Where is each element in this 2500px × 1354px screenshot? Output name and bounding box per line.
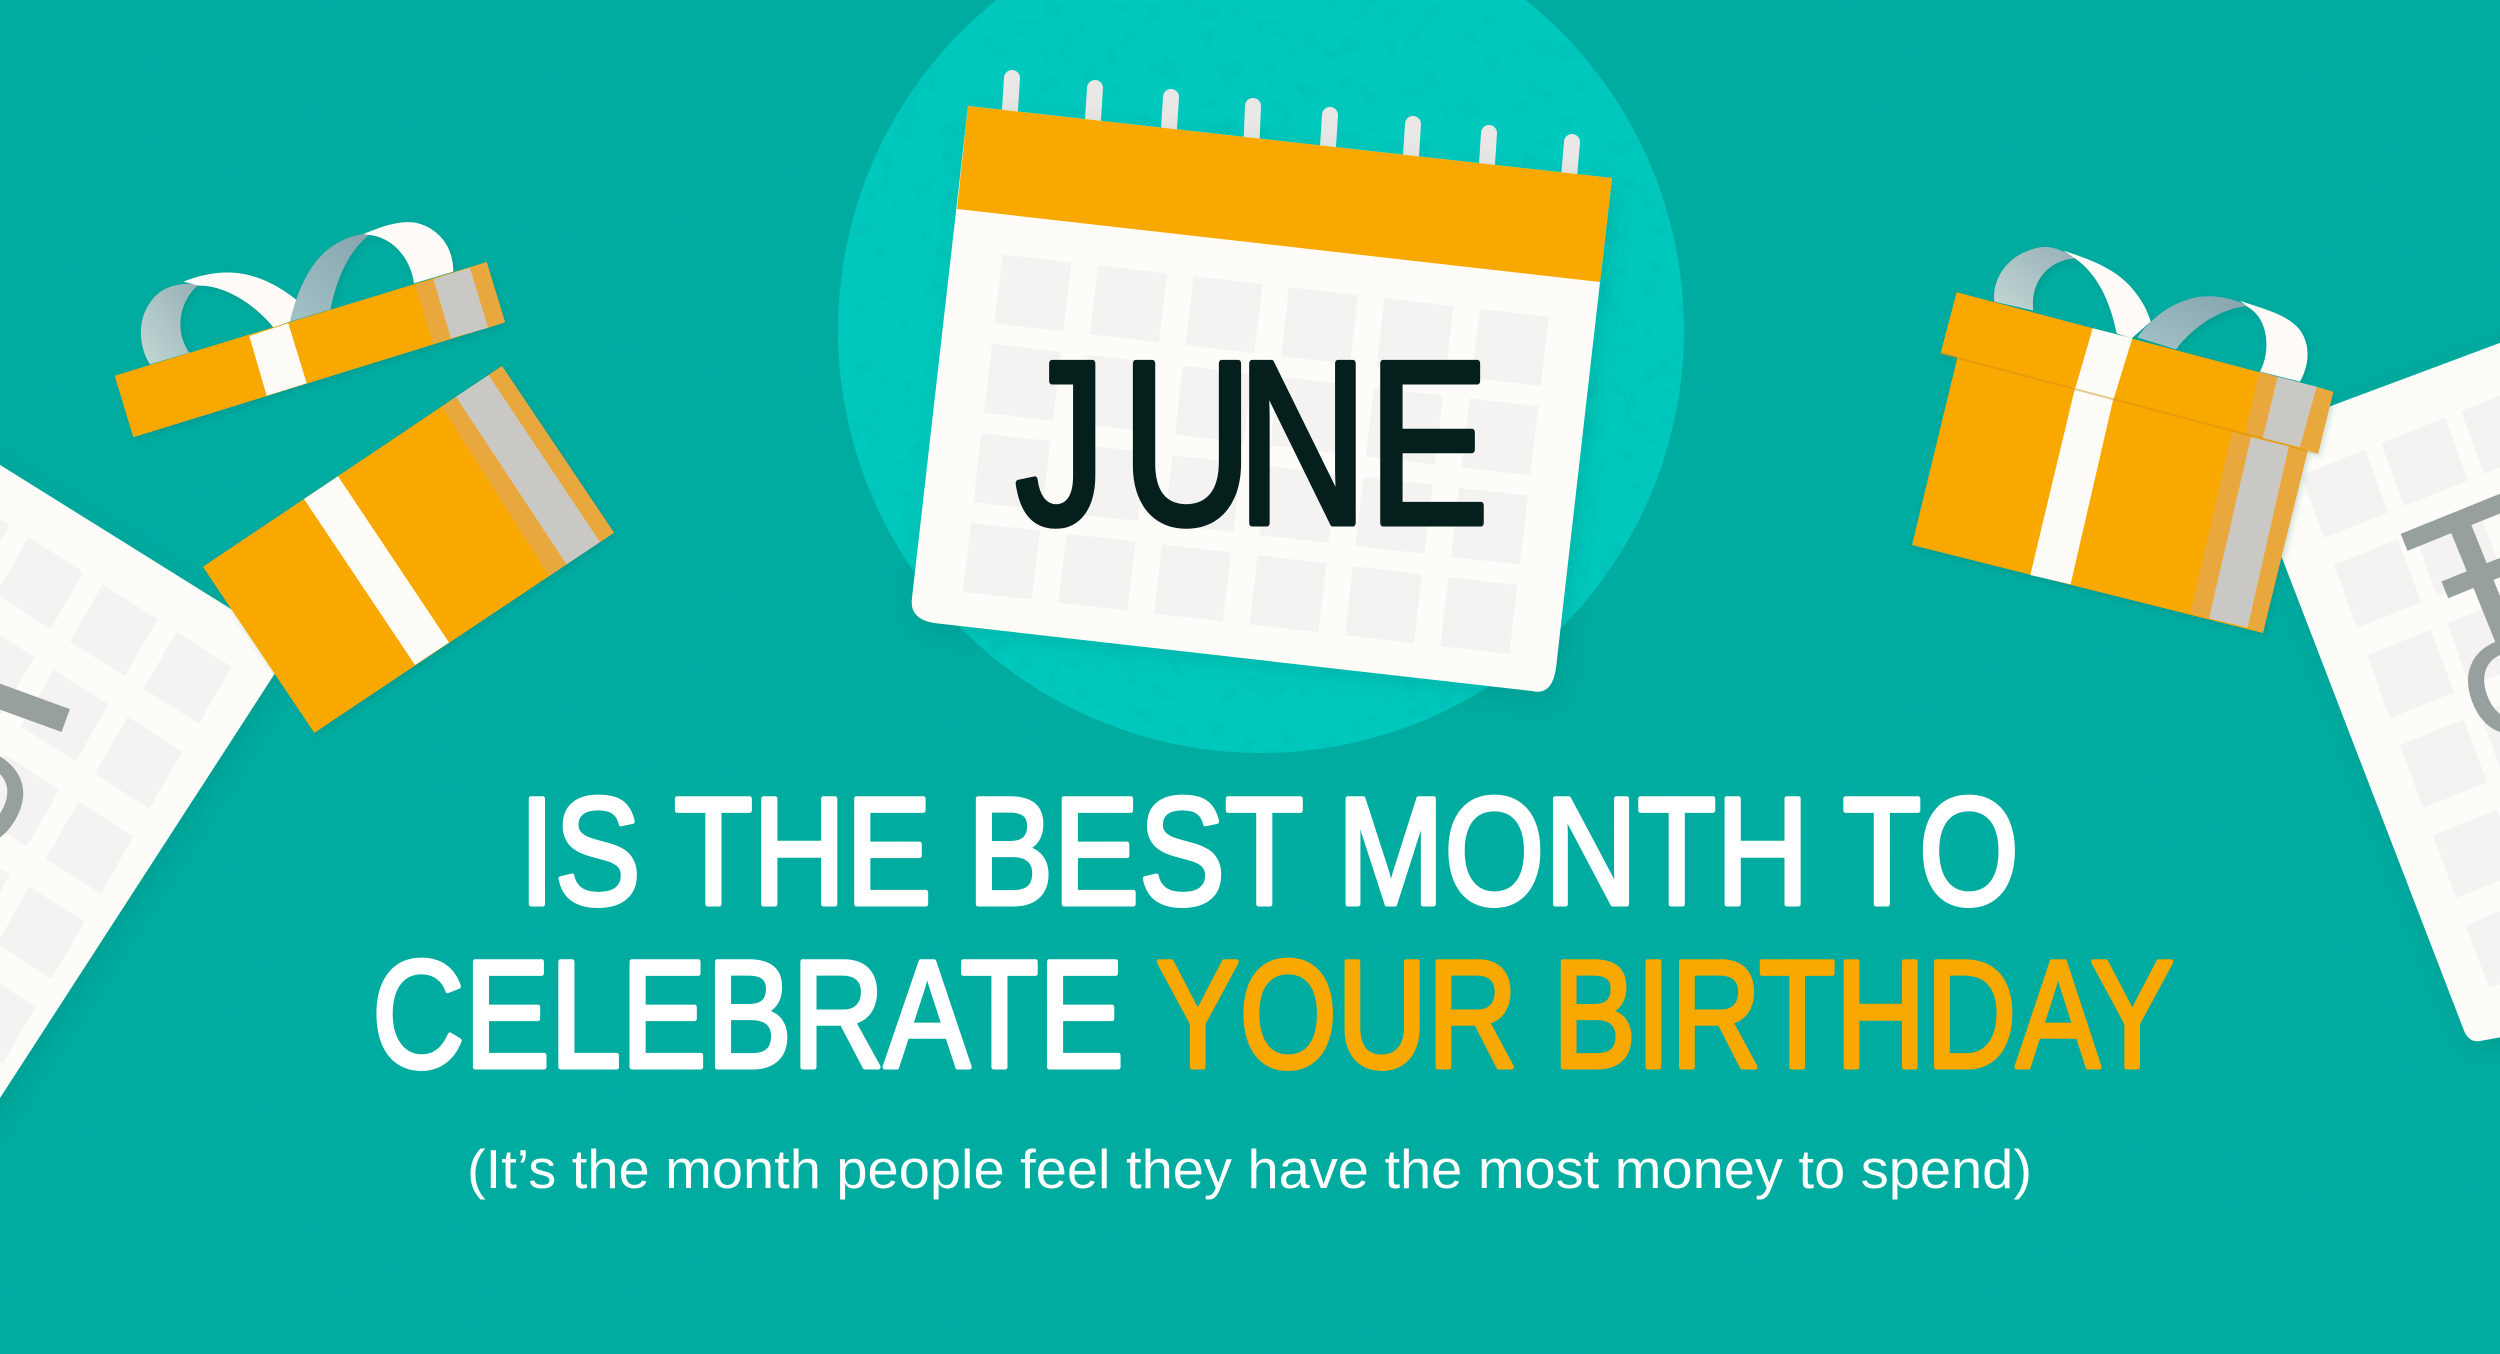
right gift with ribbon bow [1912, 247, 2333, 633]
calendar binding rings [1009, 78, 1572, 189]
headline line 1: IS THE BEST MONTH TO [519, 766, 2019, 937]
headline line 2: white part: CELEBRATE [372, 929, 1124, 1100]
subtitle: (It’s the month people feel they have the most money to spend) [467, 1138, 2032, 1200]
main June calendar [912, 78, 1612, 692]
headline line 2: orange part: YOUR BIRTHDAY [1156, 929, 2174, 1100]
calendar header band [957, 106, 1612, 282]
left gift lid with ribbon bow [115, 222, 505, 437]
headline [372, 766, 2174, 1100]
spotlight circle behind calendar [838, 0, 1684, 753]
calendar page [912, 106, 1612, 692]
right calendar (cropped) [2237, 328, 2500, 1041]
left calendar (cropped) [0, 440, 292, 1160]
calendar day grid [963, 254, 1549, 654]
month label: JUNE: JUNE [1016, 314, 1489, 573]
left gift box base [203, 366, 614, 733]
